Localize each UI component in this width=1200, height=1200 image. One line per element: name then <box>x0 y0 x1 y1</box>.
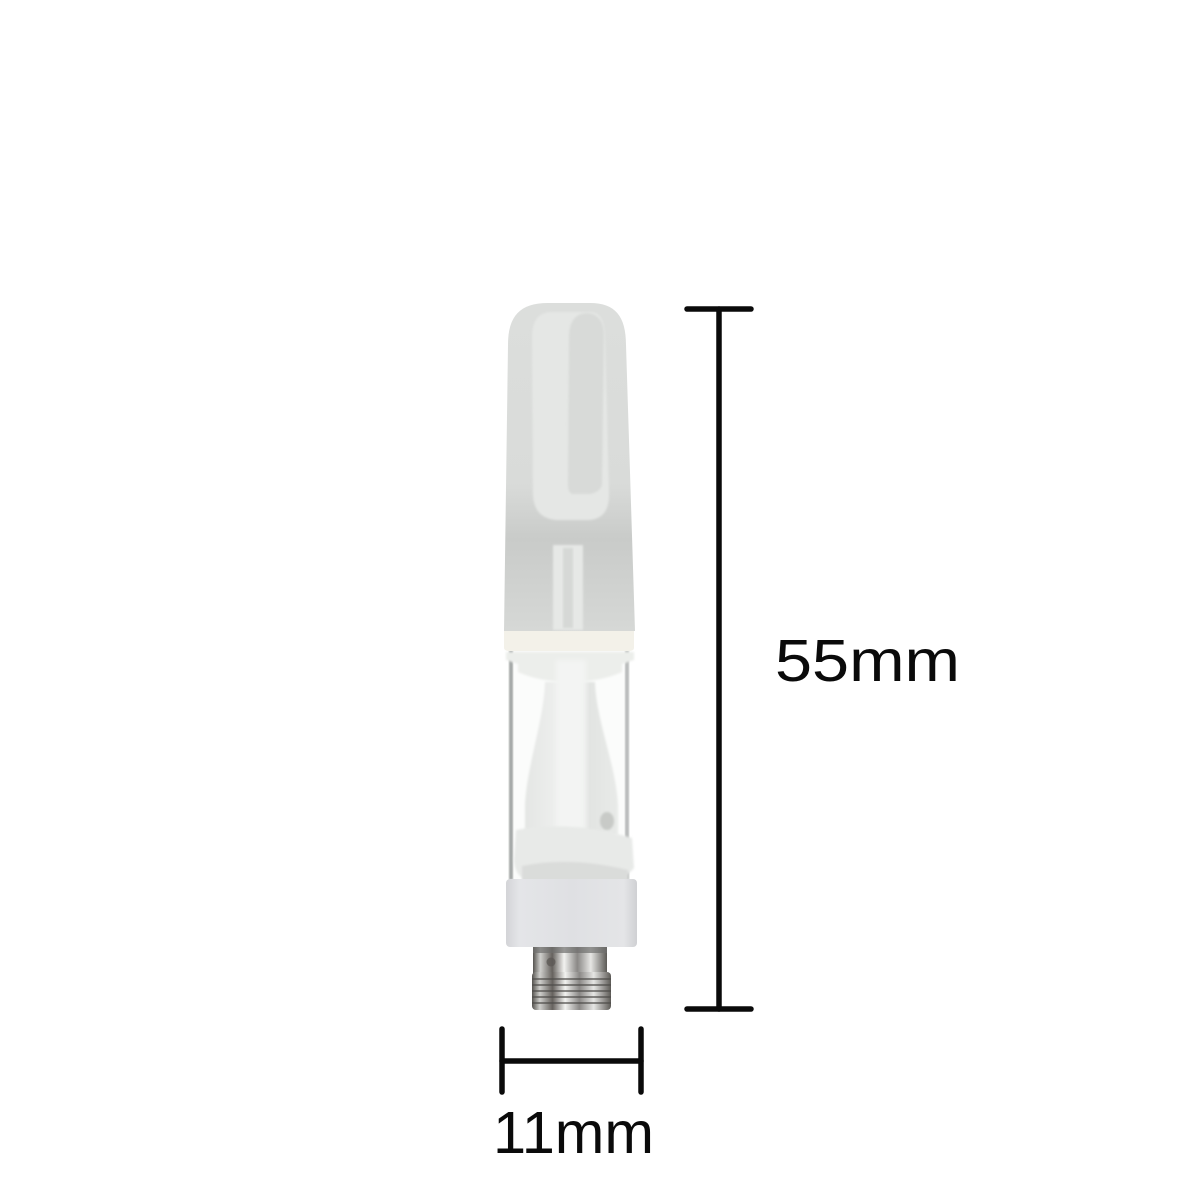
white collar <box>506 879 637 947</box>
inner ceramic core <box>514 660 634 882</box>
glass tank <box>506 650 634 882</box>
height dimension bracket <box>687 309 751 1009</box>
white mouthpiece <box>504 303 635 631</box>
width dimension bracket <box>502 1029 641 1092</box>
cartridge product photo <box>504 303 637 1010</box>
metal connector <box>532 947 611 1010</box>
frosted band <box>504 628 634 651</box>
height label: 55mm <box>775 628 960 694</box>
width label: 11mm <box>493 1100 654 1166</box>
